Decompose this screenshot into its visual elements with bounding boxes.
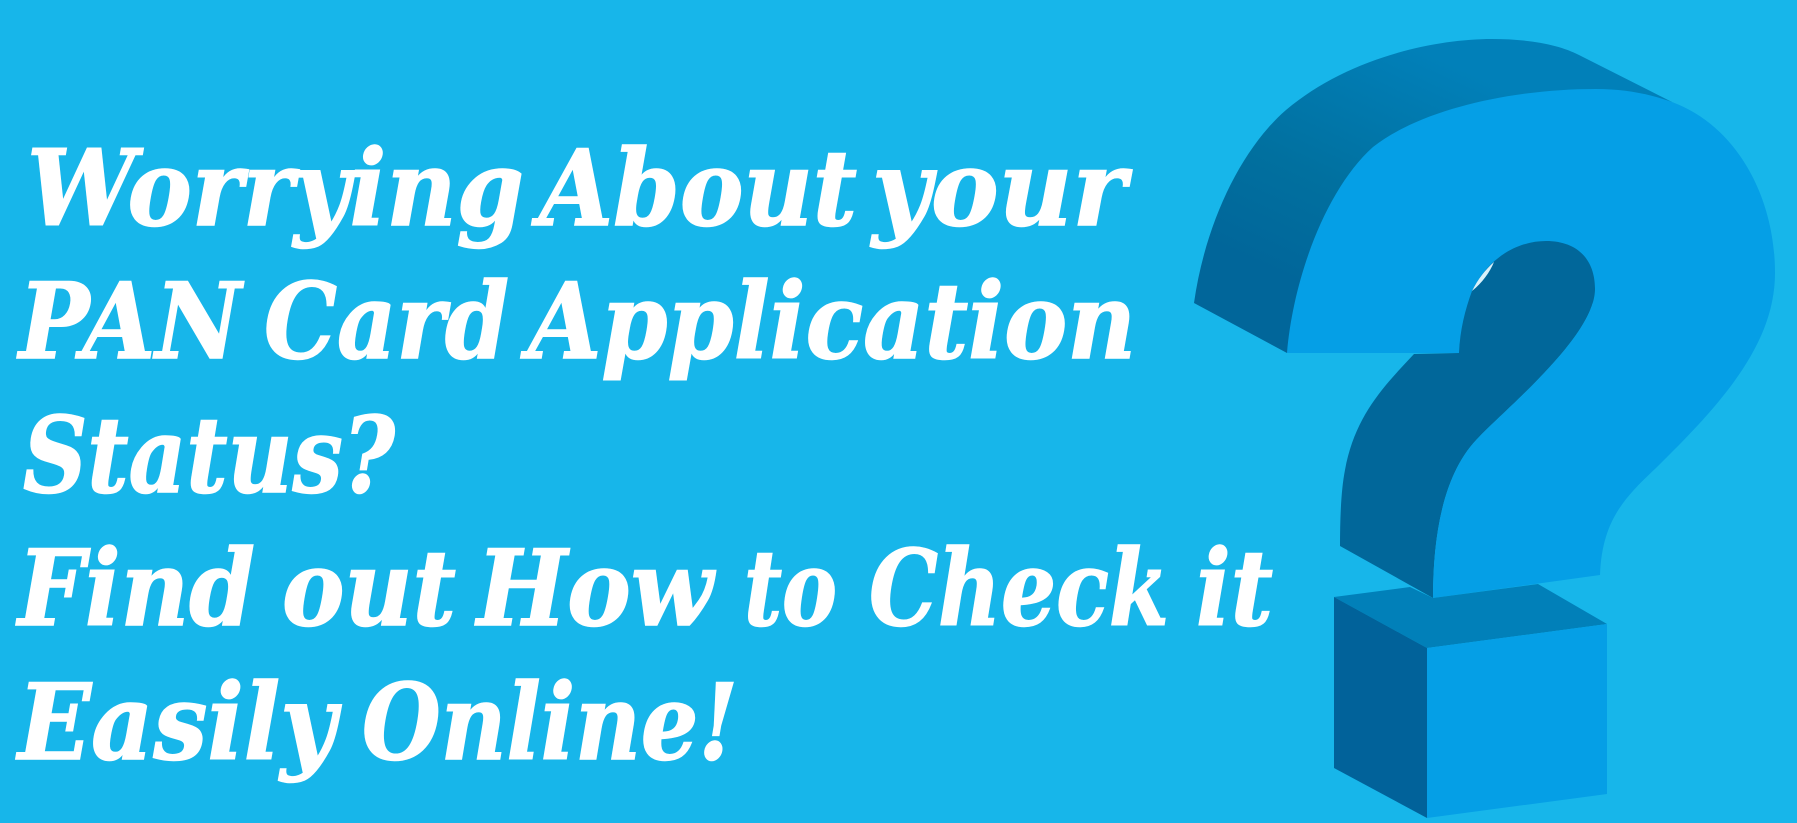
- highlight sliver: [1472, 262, 1494, 291]
- title text: PAN: [16, 259, 245, 383]
- title text: out: [282, 526, 456, 650]
- title text: Find: [15, 526, 255, 650]
- question mark hook side face: [1194, 39, 1672, 353]
- title text: How: [474, 526, 716, 650]
- title text: it: [1196, 526, 1273, 650]
- question mark stem and inner side face: [1340, 241, 1595, 598]
- title text: Easily: [15, 660, 342, 784]
- title text: Application: [520, 259, 1136, 383]
- title text: Online!: [362, 660, 738, 784]
- title text: Worrying: [27, 126, 524, 250]
- icon: 3D question mark: [1194, 39, 1775, 818]
- title text: to: [744, 526, 837, 650]
- title text: Check: [869, 526, 1169, 650]
- base front face: [1427, 624, 1607, 818]
- title text: Card: [264, 259, 509, 383]
- question mark front face: [1287, 89, 1775, 598]
- base left face: [1334, 597, 1427, 818]
- base top face: [1334, 584, 1607, 648]
- title text: About: [531, 126, 857, 250]
- title text: your: [870, 126, 1132, 250]
- title text: [15, 126, 1273, 784]
- title text: Status?: [23, 393, 396, 517]
